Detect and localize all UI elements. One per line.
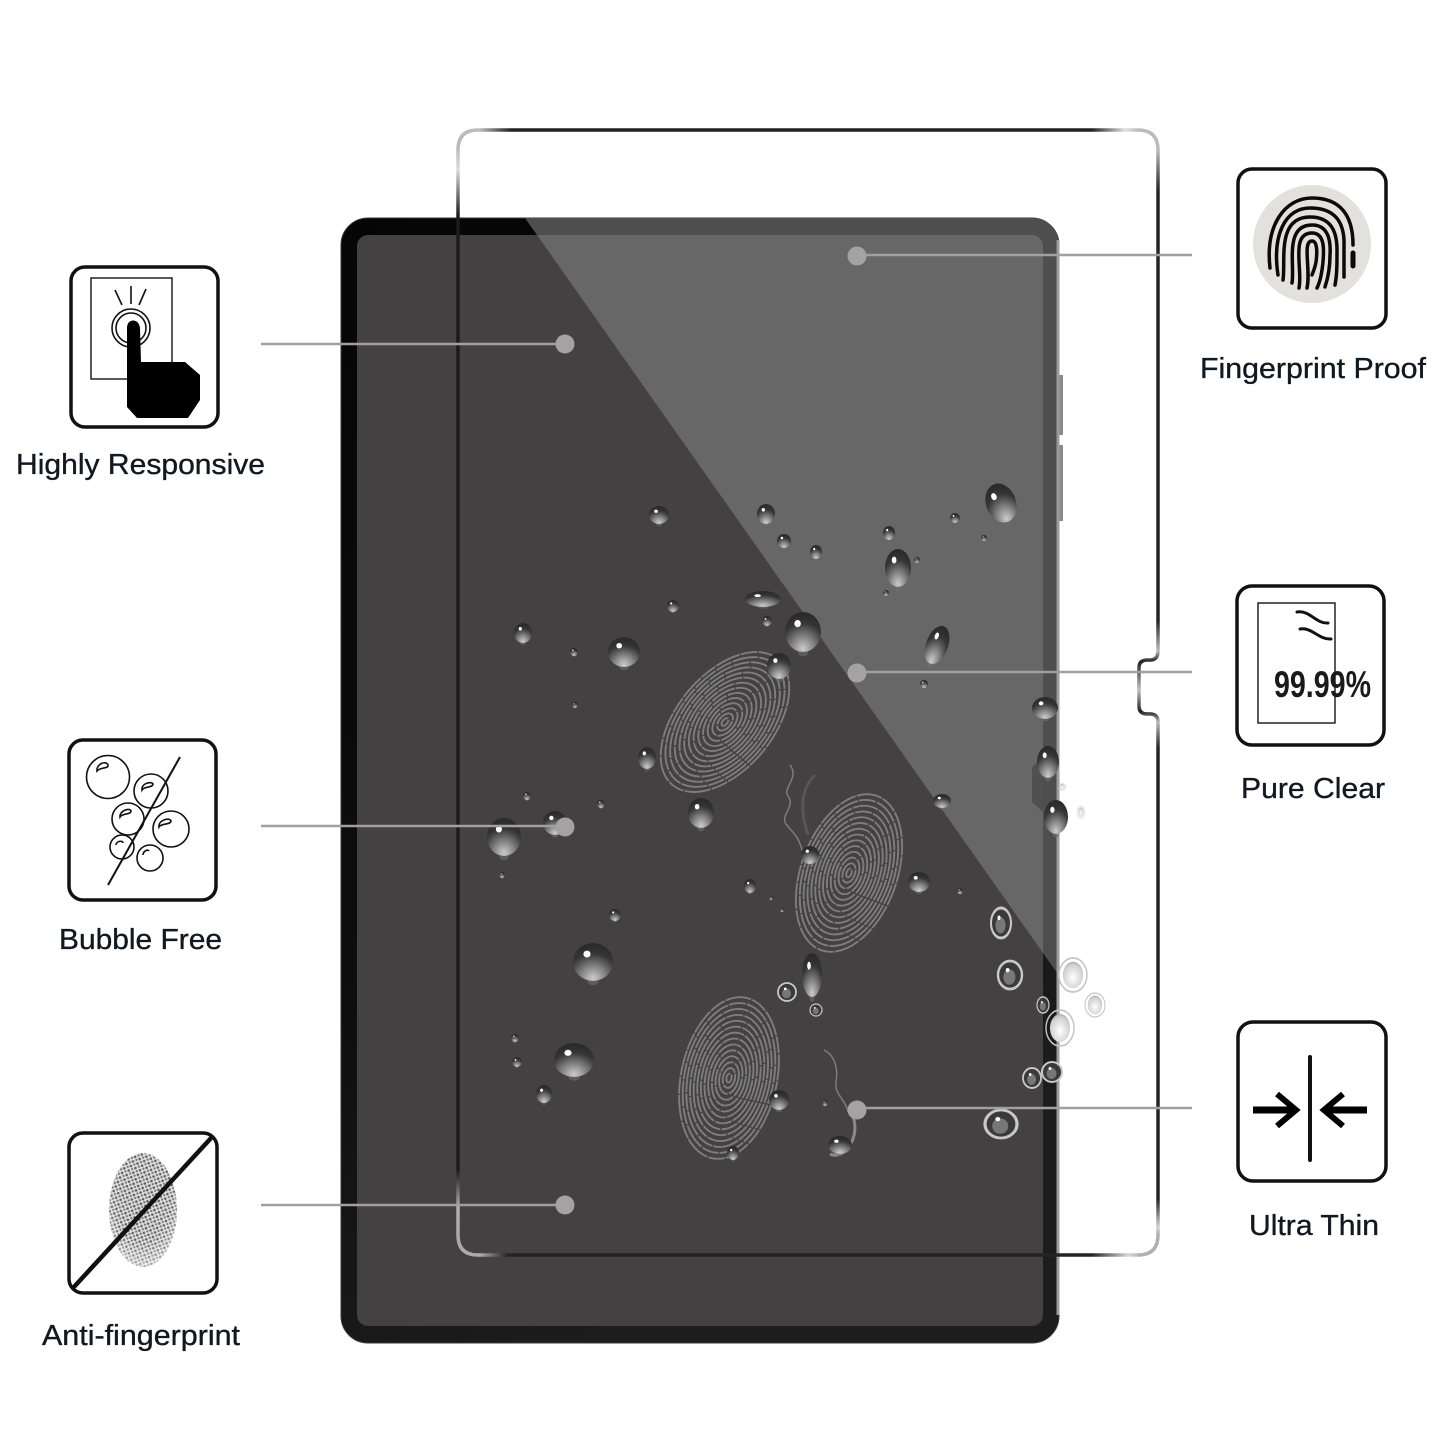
label: anti-fingerprint: Anti-fingerprint — [42, 1320, 240, 1352]
icon: pure clear: 99.99% — [1274, 664, 1371, 705]
callout lines and dots — [261, 246, 1192, 1214]
tablet body bezel — [341, 218, 1059, 1343]
glare over bezel — [525, 218, 1060, 977]
right callout: ultra thin — [848, 1100, 1192, 1120]
smear trails — [785, 765, 855, 1155]
label: pure clear: Pure Clear — [1241, 773, 1385, 805]
label: highly responsive: Highly Responsive — [16, 449, 265, 481]
label: bubble free: Bubble Free — [59, 924, 222, 956]
label: ultra thin: Ultra Thin — [1249, 1210, 1379, 1242]
icon: ultra thin — [1238, 1022, 1386, 1181]
icon: fingerprint proof — [1238, 169, 1386, 328]
left callout: bubble free — [261, 818, 574, 836]
icon: anti-fingerprint — [69, 1133, 217, 1293]
icon: bubble free — [69, 740, 216, 900]
camera bump — [1032, 755, 1043, 812]
tablet device — [341, 218, 1063, 1343]
screen glare — [537, 235, 1043, 952]
label: fingerprint proof: Fingerprint Proof — [1200, 353, 1427, 385]
right callout: fingerprint proof — [848, 246, 1192, 266]
screen — [357, 235, 1043, 1326]
left callout: highly responsive — [261, 334, 574, 354]
right light edge — [1056, 240, 1060, 1315]
icon: pure clear — [1237, 586, 1384, 745]
glass protector outline — [458, 130, 1158, 1255]
ringed water drops at lower right — [778, 908, 1062, 1138]
icon: highly responsive — [71, 267, 218, 427]
fingerprint smudges on screen — [636, 628, 922, 1168]
water drops outside the tablet edge — [1046, 783, 1105, 1046]
left callout: anti-fingerprint — [261, 1196, 574, 1214]
side buttons — [1059, 375, 1063, 521]
water drops on screen — [487, 479, 1068, 1162]
right callout: pure clear — [848, 664, 1192, 682]
